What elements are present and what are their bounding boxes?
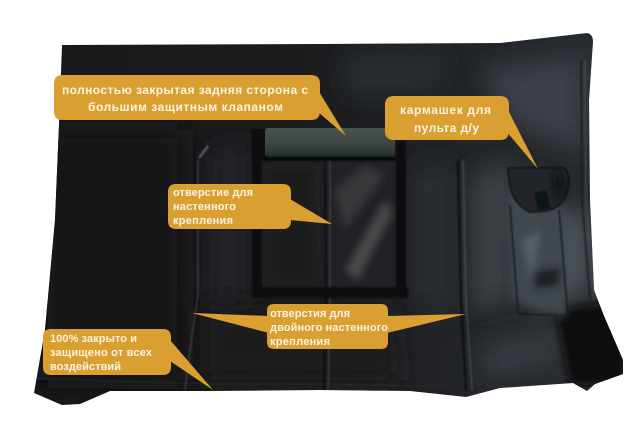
- callout: fully closed: 100% закрыто и: [50, 333, 137, 345]
- pocket flap: [508, 168, 568, 212]
- callout: double wall mount openings: отверстия для: [270, 308, 350, 320]
- callout: double wall mount openings: [192, 304, 466, 349]
- infographic canvas: [34, 33, 623, 405]
- callout: fully closed: воздействий: [50, 361, 121, 373]
- remote pocket: [507, 168, 568, 318]
- callout: double wall mount openings: двойного настенного: [270, 322, 388, 334]
- callout: wall mount opening: крепления: [173, 215, 233, 227]
- callout: double wall mount openings: крепления: [270, 336, 330, 348]
- window panel: [262, 158, 396, 288]
- velcro frame: [252, 130, 408, 298]
- callout: back side with flap: [54, 75, 346, 136]
- callout: back side with flap: полностью закрытая задняя сторона с: [62, 83, 308, 97]
- hem and seams: [36, 60, 594, 390]
- callout: wall mount opening: отверстие для: [173, 187, 253, 199]
- callout: remote pocket: кармашек для: [400, 103, 491, 117]
- fabric highlights: [40, 55, 625, 385]
- callout: wall mount opening: настенного: [173, 201, 236, 213]
- callout: fully closed: защищено от всех: [50, 347, 153, 359]
- callout: remote pocket: [385, 96, 538, 169]
- cover: black bag photo: [34, 33, 625, 405]
- callout: remote pocket: пульта д/у: [414, 121, 479, 135]
- callout: back side with flap: большим защитным клапаном: [88, 100, 283, 114]
- folded back flap roll: [252, 128, 396, 161]
- callout: wall mount opening: [168, 184, 332, 229]
- callout: fully closed: [43, 329, 213, 390]
